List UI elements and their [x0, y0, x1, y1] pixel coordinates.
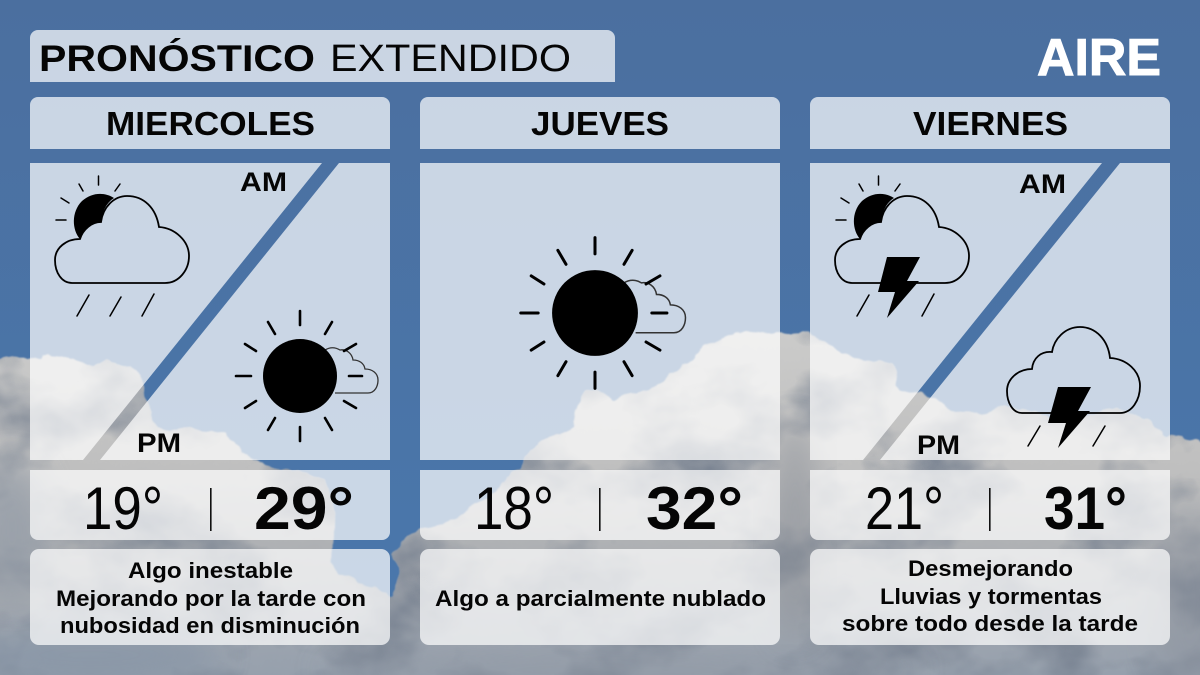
temperatures: miercoles: 19° — [83, 475, 163, 542]
temperatures: viernes: 31° — [1044, 475, 1127, 542]
panel: viernes — [810, 97, 1170, 645]
icon: sun with small cloud — [521, 238, 685, 388]
description: viernes — [810, 549, 1170, 645]
forecast box: miercoles: PM — [137, 428, 181, 458]
title panel: EXTENDIDO — [330, 38, 571, 80]
forecast box: miercoles — [30, 163, 390, 460]
forecast box: viernes — [810, 163, 1170, 460]
icon: sun behind cloud with rain — [55, 176, 189, 316]
forecast box: viernes: AM — [1019, 169, 1066, 199]
temperatures: miercoles — [30, 470, 390, 542]
description: viernes: sobre todo desde la tarde — [842, 611, 1138, 636]
heading: viernes: VIERNES — [913, 105, 1068, 142]
description: miercoles — [30, 549, 390, 645]
logo: AIRE: AIRE — [1037, 29, 1161, 87]
icon: sun behind storm cloud — [835, 176, 969, 318]
temperatures: viernes — [810, 470, 1170, 542]
description: miercoles: Algo inestable — [128, 558, 293, 583]
panel: jueves — [420, 97, 780, 645]
icon: storm cloud — [1007, 327, 1140, 448]
forecast box: jueves — [420, 163, 780, 460]
forecast box: viernes: PM — [917, 430, 960, 460]
icon: sun with small cloud — [236, 311, 378, 441]
heading: jueves: JUEVES — [531, 105, 669, 142]
forecast box: miercoles: AM — [240, 167, 287, 197]
description: miercoles: nubosidad en disminución — [60, 613, 360, 638]
temperatures: jueves: 18° — [474, 475, 554, 542]
heading: miercoles: MIERCOLES — [106, 105, 315, 142]
temperatures: viernes: 21° — [865, 475, 944, 542]
description: jueves — [420, 549, 780, 645]
temperatures: jueves — [420, 470, 780, 542]
heading: viernes — [810, 97, 1170, 149]
panel: miercoles — [30, 97, 390, 645]
heading: miercoles — [30, 97, 390, 149]
description: viernes: Lluvias y tormentas — [880, 584, 1102, 609]
temperatures: jueves: 32° — [646, 475, 743, 542]
description: viernes: Desmejorando — [908, 556, 1073, 581]
heading: jueves — [420, 97, 780, 149]
description: jueves: Algo a parcialmente nublado — [435, 586, 766, 611]
title panel — [30, 30, 615, 82]
description: miercoles: Mejorando por la tarde con — [56, 586, 366, 611]
title panel: PRONÓSTICO — [39, 37, 315, 79]
temperatures: miercoles: 29° — [254, 475, 354, 542]
